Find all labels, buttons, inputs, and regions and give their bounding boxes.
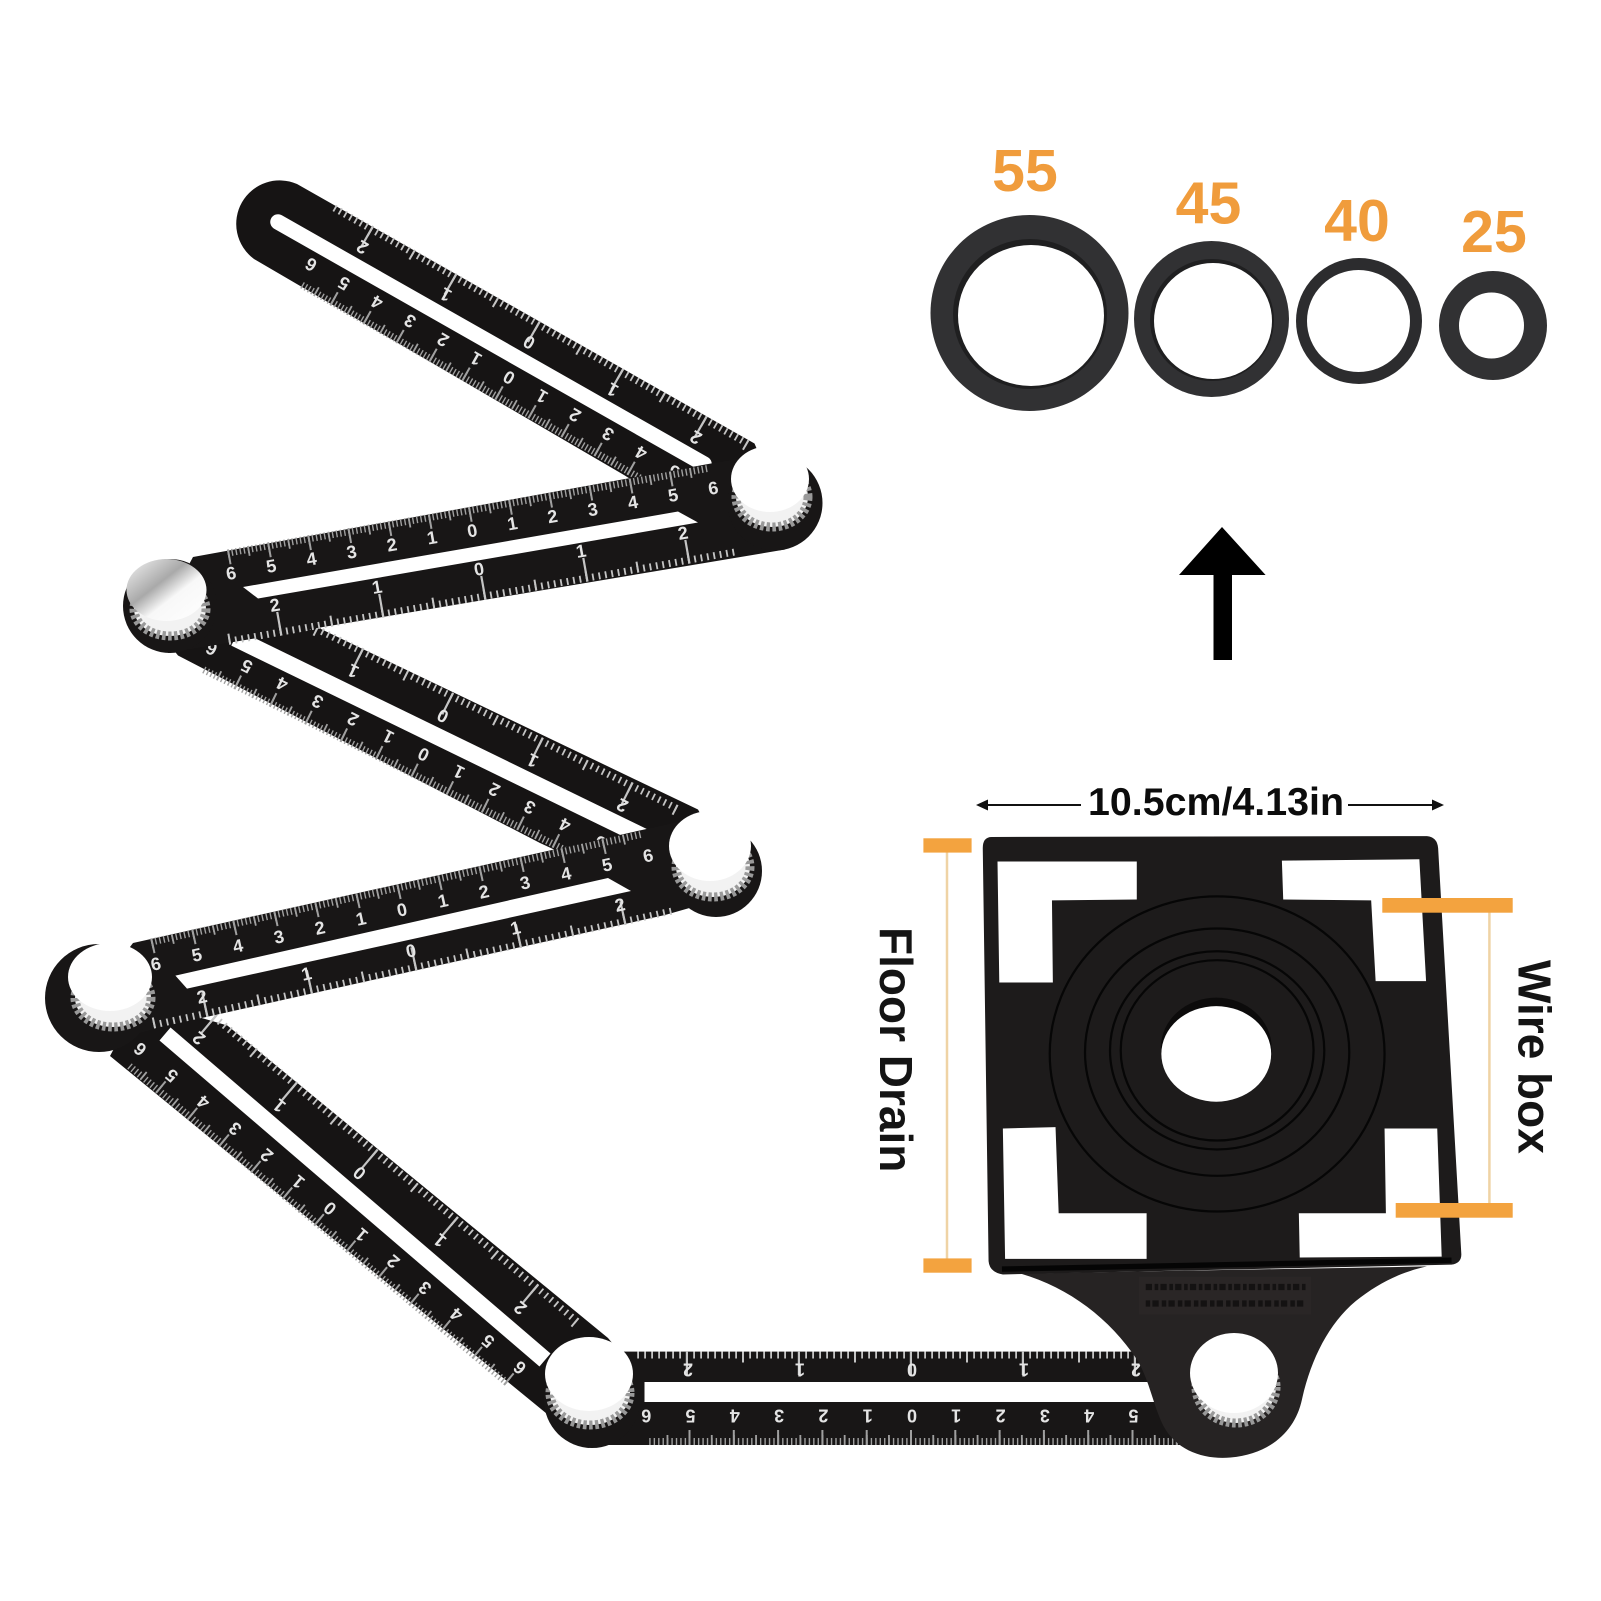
label 55: 55 [992,138,1058,204]
arm 1 slot [278,222,704,464]
arm 1 scale: 21012 [353,236,705,448]
arm 1 body [236,180,770,510]
width label: 10.5cm/4.13in [1088,781,1344,824]
arm 1 scale: 6543210123456 [302,253,716,502]
concentric ring grooves [1050,896,1385,1212]
arm 5 body [110,1000,660,1448]
square locator plate with tail [983,836,1461,1458]
label 45: 45 [1176,170,1241,236]
arm 4 scale: 6543210123456 [149,845,655,975]
knob 5 [545,1337,633,1425]
arm 6 scale [632,1355,1192,1442]
ruler arm 1 (top) [236,180,770,516]
arm 2 scale [214,466,739,641]
arm 2 slot [243,512,698,598]
arm 3 slot [235,638,652,841]
arm 3 scale: 21012 [254,615,631,817]
hinge disc 1 [728,456,822,550]
centre hole shadow [1161,998,1272,1098]
knob 1 [731,446,809,527]
ruler arm 4 [45,817,762,1052]
arm 4 scale: 21012 [195,894,627,1008]
ruler arm 3 [150,585,720,886]
hinge disc 2 [123,559,217,653]
arm 3 body [150,600,720,880]
arm 4 body [99,817,735,1044]
wire box label: Wire box [1508,960,1560,1154]
arm 4 slot [175,878,631,989]
plate body [983,836,1461,1274]
floor drain dimension marker [923,838,972,1273]
window bottom right [1299,1128,1442,1258]
arm 4 scale [136,831,676,1025]
knob 2 (silver cap) [126,559,206,636]
arm 6 body [600,1352,1200,1445]
ring 55 [930,215,1128,411]
arm 6 slot [644,1382,1164,1402]
knob 3 [669,811,751,897]
arm 5 slot [165,1034,545,1360]
ring 25 [1439,271,1547,380]
ring 40 [1296,258,1422,384]
width dimension arrows [976,800,1444,810]
arrow up to rings [1179,527,1266,660]
embossed text block [1139,1277,1311,1315]
centre hole [1161,1006,1271,1102]
arm 2 scale: 21012 [268,522,690,616]
ruler arm 2 [123,455,822,653]
window top left [998,862,1137,983]
arm 2 body [168,455,785,653]
knob 4 [68,943,152,1027]
plate tail [1021,1266,1427,1458]
ring 45 [1134,241,1289,397]
arm 5 scale: 21012 [189,1027,531,1319]
hinge disc 4 [45,944,153,1052]
plate bottom groove [1002,1260,1452,1269]
arm 2 scale: 6543210123456 [224,478,720,584]
knob 6 [1190,1333,1278,1423]
arm 6 scale: 6543210123456 [641,1406,1183,1426]
wire box dimension marker [1382,898,1513,1218]
arm 6 scale: 21012 [683,1360,1141,1380]
label 40: 40 [1324,188,1390,254]
window bottom left [1003,1127,1147,1259]
floor drain label: Floor Drain [870,927,922,1172]
ruler arm 5 [110,985,660,1448]
arm 3 scale: 6543210123456 [203,637,645,871]
ruler arm 6 (bottom horizontal) [544,1352,1200,1448]
hinge disc 5 [544,1352,640,1448]
window top right [1282,859,1426,981]
hinge disc 3 [670,825,762,917]
label 25: 25 [1461,199,1527,265]
arm 5 scale: 6543210123456 [130,1038,530,1378]
